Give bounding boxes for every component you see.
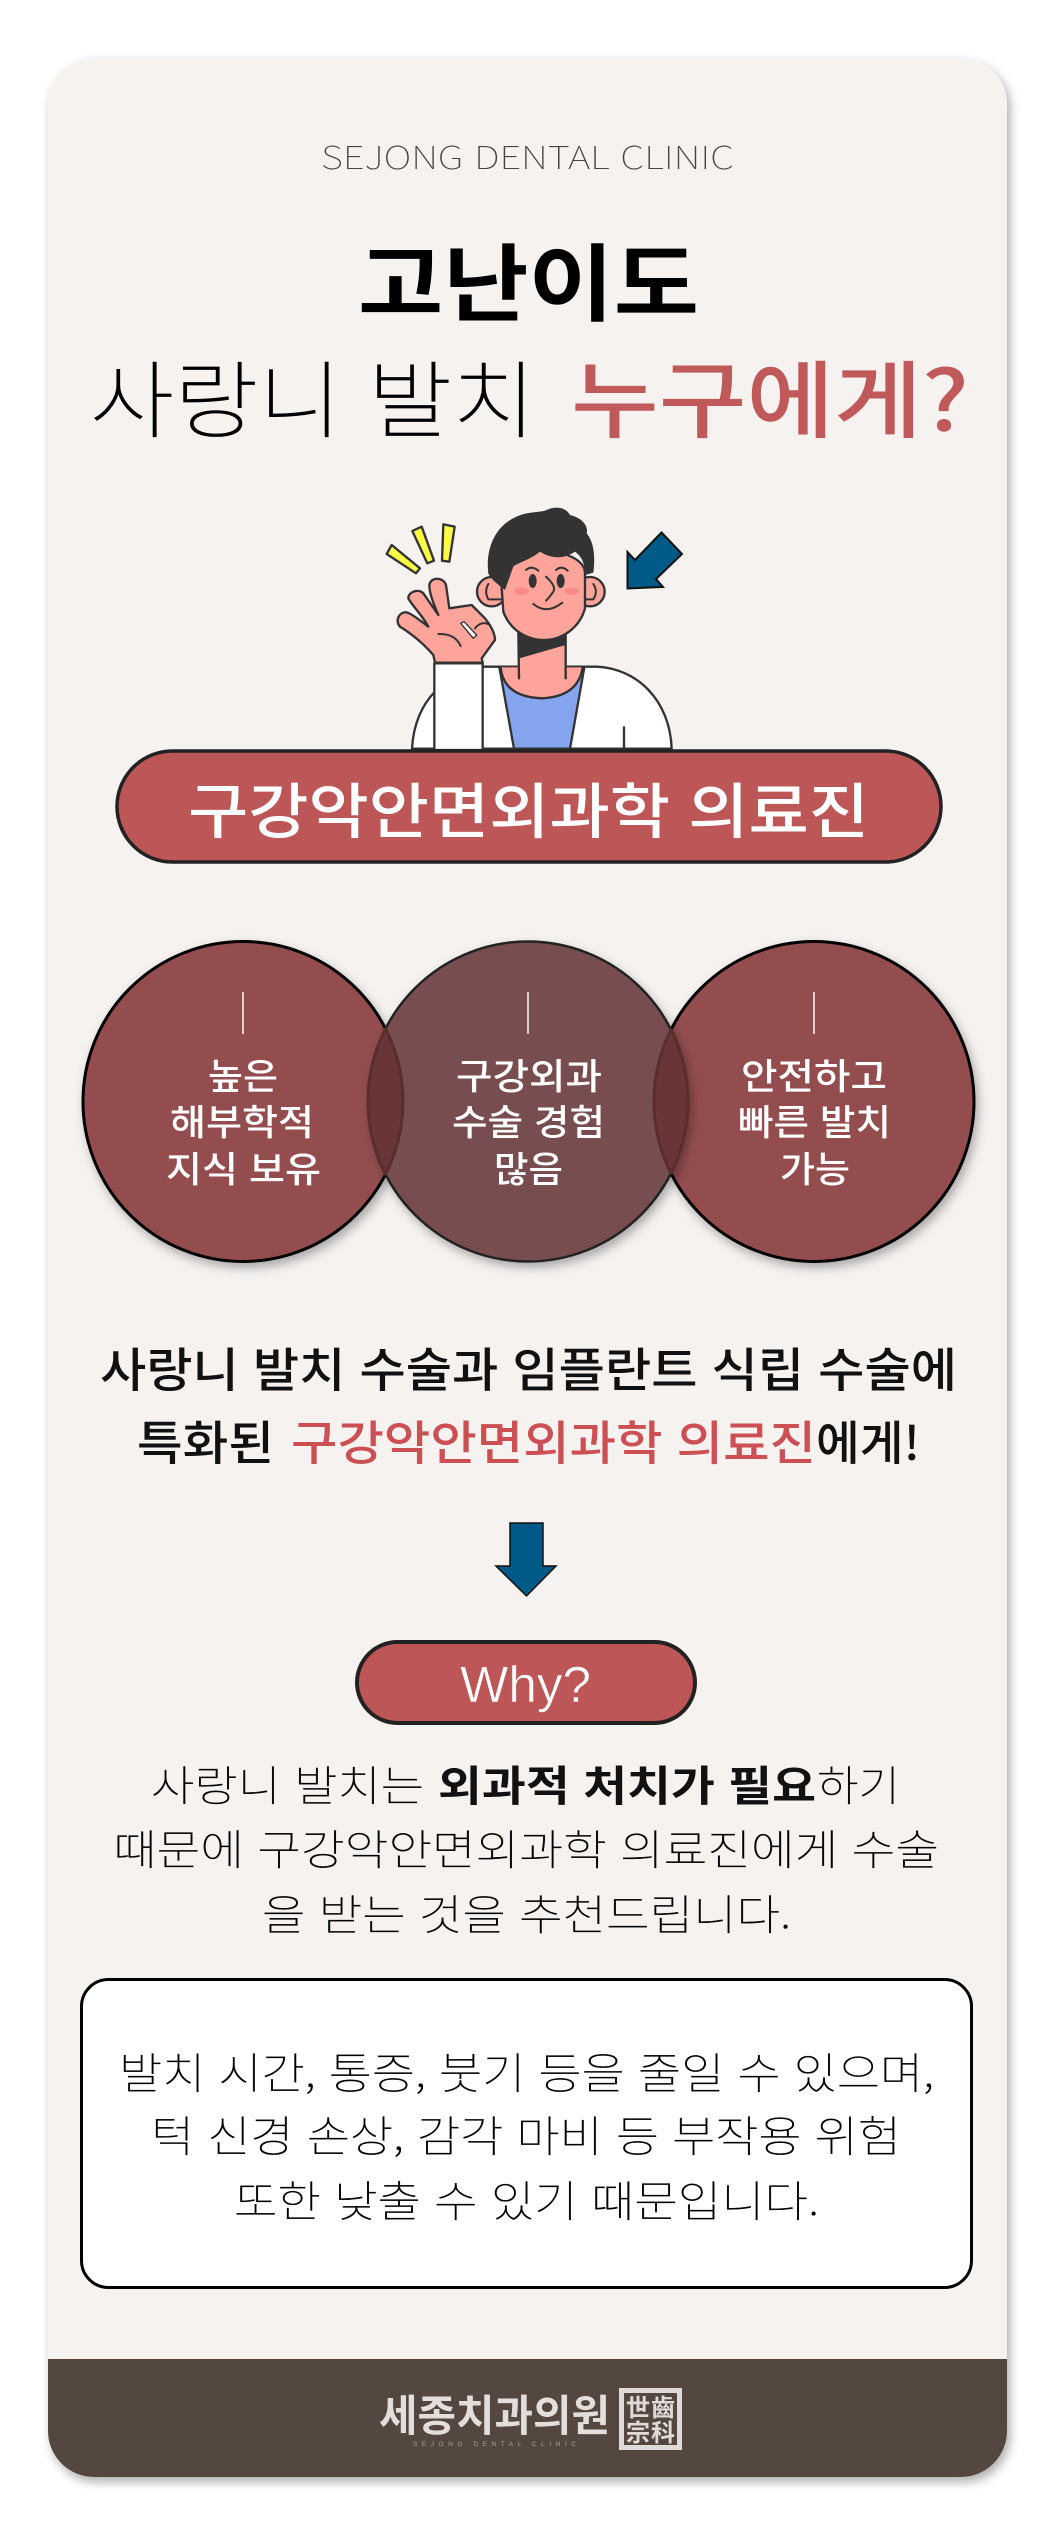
footer background: [48, 2359, 1007, 2477]
explanation line 1 start: 사랑니 발치는: [151, 1753, 424, 1814]
explanation line 1 end: 하기: [817, 1753, 900, 1814]
text: right circle: 가능: [780, 1141, 850, 1193]
box line 1: 발치 시간, 통증, 붓기 등을 줄일 수 있으며,: [119, 2040, 934, 2102]
title line 2 black: 사랑니 발치: [90, 335, 536, 456]
text: centre circle: 많음: [494, 1141, 563, 1193]
pill background: [117, 751, 941, 862]
cheek left: [514, 588, 529, 595]
panel: benefits box: [82, 1980, 972, 2288]
footer band: [48, 2359, 1007, 2477]
arrow: down: [496, 1523, 556, 1596]
coat: [412, 667, 672, 749]
shirt: [499, 667, 584, 749]
face: [501, 551, 585, 640]
title: [90, 218, 969, 456]
text block: specialised statement: [100, 1332, 957, 1474]
pill: oral surgeon heading: [117, 751, 941, 862]
title line 1: 고난이도: [358, 218, 699, 339]
explanation line 2: 때문에 구강악안면외과학 의료진에게 수술: [113, 1817, 939, 1878]
text: centre circle: 구강외과: [456, 1048, 602, 1100]
footer seal: [622, 2388, 680, 2448]
box line 3: 또한 낮출 수 있기 때문입니다.: [234, 2168, 819, 2230]
statement highlight: 구강악안면외과학 의료진: [291, 1405, 816, 1474]
box line 2: 턱 신경 손상, 감각 마비 등 부작용 위험: [151, 2103, 901, 2165]
text: left circle: 지식 보유: [166, 1141, 321, 1193]
hand: [398, 579, 495, 663]
circle: left: [83, 942, 403, 1262]
neck shadow: [518, 632, 566, 658]
footer seal: 宗: [626, 2413, 650, 2448]
footer seal: 世: [626, 2388, 650, 2423]
cheek right: [564, 588, 579, 595]
statement line 1: 사랑니 발치 수술과 임플란트 식립 수술에: [100, 1332, 957, 1401]
statement line 2 start: 특화된: [137, 1405, 274, 1474]
clinic name caption: SEJONG DENTAL CLINIC: [321, 133, 734, 179]
text: right circle: 안전하고: [741, 1048, 887, 1100]
text: centre circle: 수술 경험: [452, 1094, 605, 1146]
text: right circle: 빠른 발치: [738, 1094, 891, 1146]
arrow: pointing at doctor: [628, 532, 682, 588]
neck: [501, 627, 583, 698]
overlap left: [370, 1032, 402, 1170]
pill text: 구강악안면외과학 의료진: [188, 764, 869, 851]
statement line 2 end: 에게!: [816, 1405, 920, 1474]
overlap right: [656, 1034, 686, 1170]
text: right circle: [738, 1048, 891, 1193]
footer logo caption: SEJONG DENTAL CLINIC: [413, 2441, 576, 2448]
circle: right: [654, 942, 974, 1262]
hair: [488, 508, 594, 590]
neck sides: [518, 630, 566, 678]
text: left circle: [166, 1048, 321, 1193]
ears: [477, 577, 605, 606]
hand details: [438, 623, 490, 646]
text: centre circle: [452, 1048, 605, 1193]
finger highlight: [461, 622, 477, 638]
illustration: doctor making OK sign: [387, 508, 672, 750]
text: left circle: 높은: [208, 1048, 278, 1100]
footer seal: 齒: [651, 2388, 675, 2423]
text: left circle: 해부학적: [170, 1094, 314, 1146]
eyes: [529, 574, 537, 588]
icon: yellow sparks: [387, 524, 455, 573]
collar line: [501, 667, 583, 698]
circle: centre: [368, 942, 688, 1262]
why text: Why?: [460, 1656, 591, 1713]
why background: [357, 1642, 695, 1723]
footer seal: 科: [651, 2413, 675, 2448]
box: [82, 1980, 972, 2288]
explanation line 3: 을 받는 것을 추천드립니다.: [262, 1882, 791, 1943]
faint inner arcs: [366, 1027, 690, 1176]
text block: explanation: [113, 1753, 939, 1943]
explanation bold: 외과적 처치가 필요: [438, 1753, 816, 1814]
facial lines: [486, 568, 596, 609]
footer logo text: 세종치과의원: [379, 2382, 610, 2444]
divider ticks: [243, 992, 814, 1034]
right eye: [557, 574, 565, 588]
sleeve: [434, 663, 483, 750]
panel: three overlapping circles: [83, 942, 974, 1262]
coat seam: [620, 727, 627, 749]
title line 2 highlight: 누구에게?: [571, 335, 969, 456]
pill: why: [357, 1642, 695, 1723]
